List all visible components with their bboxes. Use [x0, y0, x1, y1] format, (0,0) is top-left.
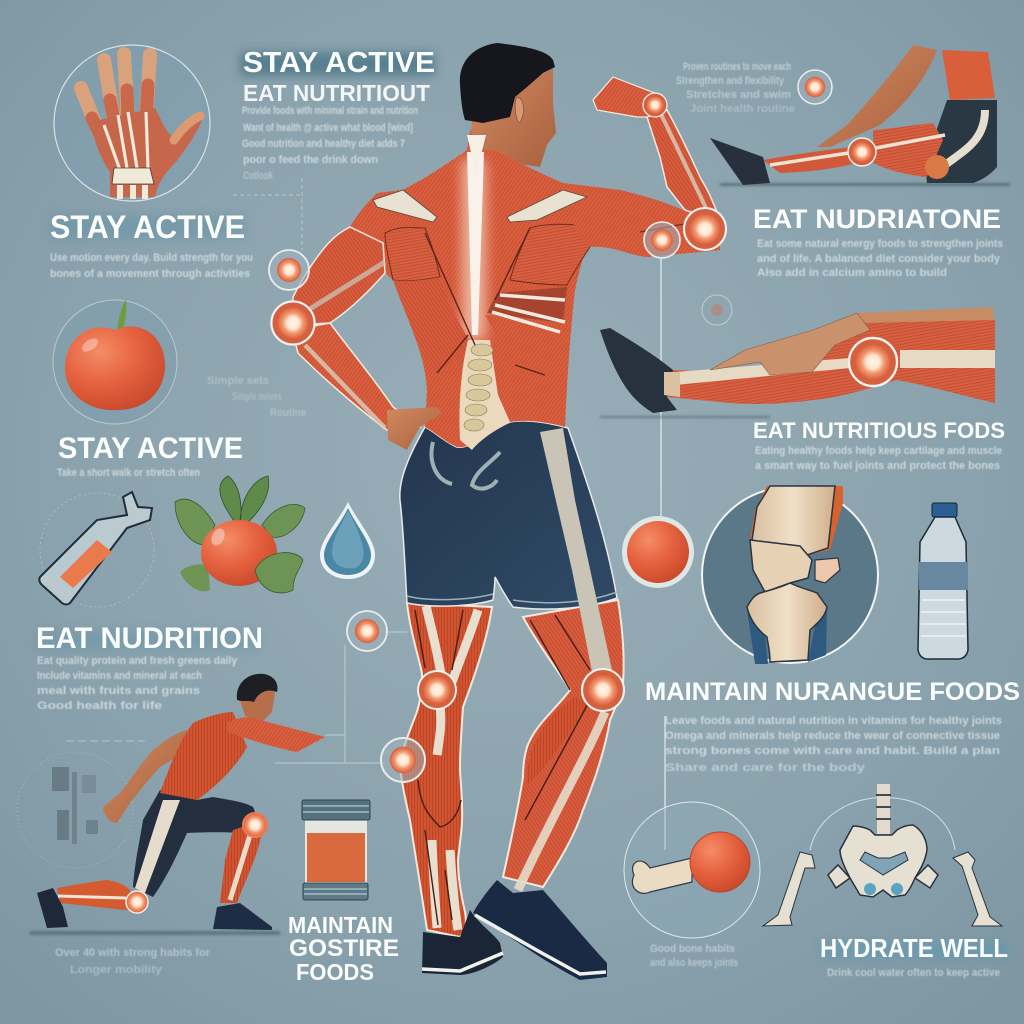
- pelvis: [828, 825, 938, 897]
- heading: stay active: Use motion every day. Build strength for you: [50, 252, 253, 264]
- right upper arm: [570, 190, 720, 257]
- right scapular muscle: [510, 224, 590, 285]
- right leg muscles: [503, 600, 624, 887]
- heading: maintain nurangue foods: Leave foods and natural nutrition in vitamins for healthy joints: [665, 715, 1002, 727]
- hair: [460, 43, 555, 123]
- main figure: anatomical back view: [292, 43, 720, 980]
- small text top right: Joint health routine: [690, 103, 795, 115]
- metacarpal bones: [104, 112, 148, 170]
- muscle division lines: [425, 228, 545, 375]
- hip joint: [925, 155, 949, 179]
- heading: eat nudrition: [36, 622, 263, 712]
- heading: eat nutritious foods: [753, 418, 1005, 472]
- faint equipment sketch: [17, 741, 145, 868]
- illustration: lunge exercise figure: [30, 674, 325, 935]
- fingers: [81, 54, 150, 135]
- arm: [817, 45, 937, 147]
- icon: supplement jar: [302, 800, 370, 900]
- patella: [750, 540, 812, 592]
- heading: stay active (second): [57, 432, 243, 479]
- illustration: lying leg with hand on knee: [600, 307, 995, 418]
- spine glow: [462, 160, 486, 340]
- right leg divisions: [525, 615, 590, 820]
- caption under lunge: [55, 947, 211, 976]
- knee glow: [849, 338, 897, 386]
- ear: [515, 97, 523, 122]
- heading: maintain nurangue foods: MAINTAIN NURANGUE FOODS: [645, 678, 1020, 706]
- spine: [877, 784, 890, 834]
- heading block: stay active / eat nutritiout: STAY ACTIVE: [243, 47, 435, 79]
- rear knee joint glow: [126, 891, 148, 913]
- heading block: stay active / eat nutritiout: EAT NUTRITIOUT: [243, 80, 430, 106]
- heading: eat nudrition: EAT NUDRITION: [36, 622, 263, 655]
- torso muscles: [350, 130, 720, 447]
- illustration: knee joint in circle: [702, 486, 878, 664]
- neck and face: [470, 68, 556, 167]
- heading: hydrate well: HYDRATE WELL: [820, 933, 1008, 963]
- torso: [160, 712, 247, 800]
- shorts hem: [407, 592, 617, 603]
- ground: [600, 416, 770, 418]
- heading: stay active: [50, 209, 253, 280]
- shoe: [710, 138, 770, 185]
- heading: maintain gostire foods: [288, 912, 399, 985]
- vertebrae: [464, 344, 493, 431]
- icon: supplement bottle: [39, 492, 154, 607]
- heading: eat nudriatone: Also add in calcium amino to build: [757, 267, 947, 279]
- caption under lunge: Over 40 with strong habits for: [55, 947, 211, 959]
- left leg muscle divisions: [415, 610, 463, 925]
- small bubble icon: [702, 295, 732, 325]
- heading block: stay active / eat nutritiout: Want of health @ active what blood [wind]: [243, 122, 413, 134]
- heading: eat nudriatone: and of life. A balanced diet consider your body: [757, 253, 1001, 265]
- heading: stay active: STAY ACTIVE: [50, 209, 245, 245]
- caption under lunge: Longer mobility: [70, 964, 163, 976]
- icon: water drop: [320, 502, 375, 579]
- spine highlight: [467, 152, 484, 335]
- fist: [593, 77, 667, 117]
- back arm: [103, 730, 187, 823]
- cartilage: [815, 558, 840, 583]
- illustration: seated leg with hand on knee: [710, 45, 1010, 186]
- knee joint glow: [243, 813, 267, 837]
- torso: [942, 50, 995, 100]
- white neck line: [467, 135, 486, 175]
- illustration: pelvis and femurs: [763, 784, 1002, 926]
- ground: [720, 183, 1010, 186]
- small text top right: [676, 61, 795, 115]
- rear shin: [57, 880, 133, 910]
- heading block: stay active / eat nutritiout: [240, 47, 435, 182]
- right calf bulge: [527, 697, 590, 785]
- ankle: [664, 372, 680, 397]
- shin bone: [770, 135, 945, 165]
- tibia side colours: [747, 610, 827, 664]
- heading: eat nudrition: meal with fruits and grains: [37, 685, 200, 697]
- calf tendon: [518, 712, 605, 890]
- left lat: [393, 277, 475, 373]
- small text below bone: Good bone habits: [650, 943, 735, 955]
- hand: [710, 313, 870, 375]
- shin: [763, 147, 857, 173]
- shorts: [400, 421, 617, 609]
- right femur: [953, 852, 1002, 926]
- left scapular muscle: [385, 227, 440, 281]
- illustration: ball and bone in circle: [624, 802, 760, 938]
- heading: eat nudriatone: Eat some natural energy foods to strengthen joints: [757, 238, 1003, 250]
- left forearm: [292, 323, 420, 430]
- heading: maintain nurangue foods: strong bones come with care and habit. Build a plan: [665, 745, 1000, 757]
- scapula bone right: [507, 190, 587, 222]
- shorts stripe: [945, 110, 985, 165]
- hair: [237, 674, 277, 702]
- femur side muscle: [750, 486, 843, 555]
- left shoe: [422, 910, 503, 975]
- left upper arm: [292, 227, 385, 325]
- heading: stay active (second): Take a short walk or stretch often: [57, 467, 200, 479]
- small text top right: Stretches and swim: [686, 89, 791, 101]
- heading: stay active (second): STAY ACTIVE: [58, 432, 243, 465]
- pants: [133, 790, 255, 897]
- heading: maintain nurangue foods: [645, 678, 1020, 774]
- heading block: stay active / eat nutritiout: Provide foods with minimal strain and nutrition: [242, 105, 418, 117]
- tibia: [747, 583, 827, 662]
- icon: apple in circle: [53, 299, 177, 424]
- forearm tendon right: [660, 112, 707, 210]
- heading: maintain nurangue foods: Share and care for the body: [665, 762, 866, 774]
- heading block: stay active / eat nutritiout: Good nutrition and healthy diet adds 7: [242, 138, 405, 150]
- rear shoe: [37, 888, 68, 928]
- pants stripe: [135, 800, 180, 893]
- scapula bone left: [373, 190, 437, 222]
- left leg muscles: [400, 603, 492, 937]
- right forearm: [647, 110, 720, 222]
- heading: maintain gostire foods: GOSTIRE: [289, 935, 399, 962]
- thigh: [873, 123, 943, 177]
- left hand: [387, 407, 442, 450]
- upper arm divide: [640, 222, 695, 232]
- heading: hydrate well: Drink cool water often to keep active: [827, 967, 1000, 979]
- small text near apple: Simple sets: [207, 375, 269, 387]
- glute folds: [432, 442, 500, 489]
- ribs: [487, 287, 567, 323]
- small text near apple: Routine: [270, 407, 306, 419]
- heading: eat nutritious foods: EAT NUTRITIOUS FODS: [753, 418, 1005, 443]
- small text near apple: Simple moves: [232, 391, 282, 403]
- right shoe: [473, 880, 607, 980]
- finger muscle ends: [92, 85, 148, 135]
- heading: stay active: bones of a movement through activities: [50, 268, 250, 280]
- heading block: stay active / eat nutritiout: Cutlook: [243, 170, 274, 182]
- connector lines: [233, 178, 665, 850]
- orb: red ball: [622, 516, 694, 588]
- head: [240, 675, 276, 722]
- right lat: [485, 315, 563, 375]
- leg muscles: [667, 320, 995, 404]
- shoe: [600, 328, 677, 413]
- heading block: stay active / eat nutritiout: poor o feed the drink down: [243, 154, 378, 166]
- heading: maintain gostire foods: FOODS: [296, 959, 374, 985]
- small text top right: Strengthen and flexibility: [676, 75, 785, 87]
- heading: eat nudrition: Eat quality protein and fresh greens daily: [37, 655, 238, 667]
- lower openings: [864, 883, 903, 895]
- pelvic opening: [860, 852, 908, 875]
- small text below bone: [650, 943, 738, 969]
- shorts stripe and thigh bone: [540, 428, 612, 672]
- left femur: [763, 852, 815, 926]
- shorts: [925, 100, 997, 183]
- icon: tomato with leaves: [175, 476, 305, 593]
- heading: eat nudrition: Include vitamins and mineral at each: [37, 670, 202, 682]
- heading: maintain nurangue foods: Omega and minerals help reduce the wear of connective tissue: [665, 730, 1000, 742]
- small text below bone: and also keeps joints: [650, 957, 738, 969]
- small text top right: Proven routines to move each: [683, 61, 791, 73]
- thumb highlight: [174, 116, 200, 140]
- left leg tendons: [426, 606, 478, 930]
- heading: eat nutritious foods: a smart way to fuel joints and protect the bones: [755, 460, 1000, 472]
- skin thigh: [857, 307, 995, 330]
- heading: eat nudriatone: [753, 204, 1003, 279]
- joint markers on main figure: [269, 93, 726, 782]
- ground shadow: [30, 931, 280, 935]
- front arm: [227, 717, 325, 752]
- leg bone: [675, 350, 995, 385]
- heading: eat nudrition: Good health for life: [37, 700, 162, 712]
- forearm tendon: [305, 345, 385, 428]
- heading: eat nutritious foods: Eating healthy foods help keep cartilage and muscle: [755, 445, 1002, 457]
- lower back pale: [459, 340, 510, 450]
- icon: water bottle: [918, 503, 968, 659]
- left arm tendon: [305, 262, 385, 312]
- front calf: [220, 820, 263, 903]
- knee glow: [848, 138, 876, 166]
- illustration: hand anatomy in circle: [54, 45, 210, 201]
- heading: maintain gostire foods: MAINTAIN: [288, 912, 393, 938]
- heading: hydrate well: [820, 933, 1008, 979]
- heading: eat nudriatone: EAT NUDRIATONE: [753, 204, 1001, 234]
- joint bubble: top right: [798, 70, 832, 104]
- small text near apple: [207, 375, 306, 419]
- femur: [752, 486, 835, 555]
- palm: [90, 108, 204, 197]
- rib bars: [492, 295, 565, 332]
- front shoe: [213, 903, 272, 930]
